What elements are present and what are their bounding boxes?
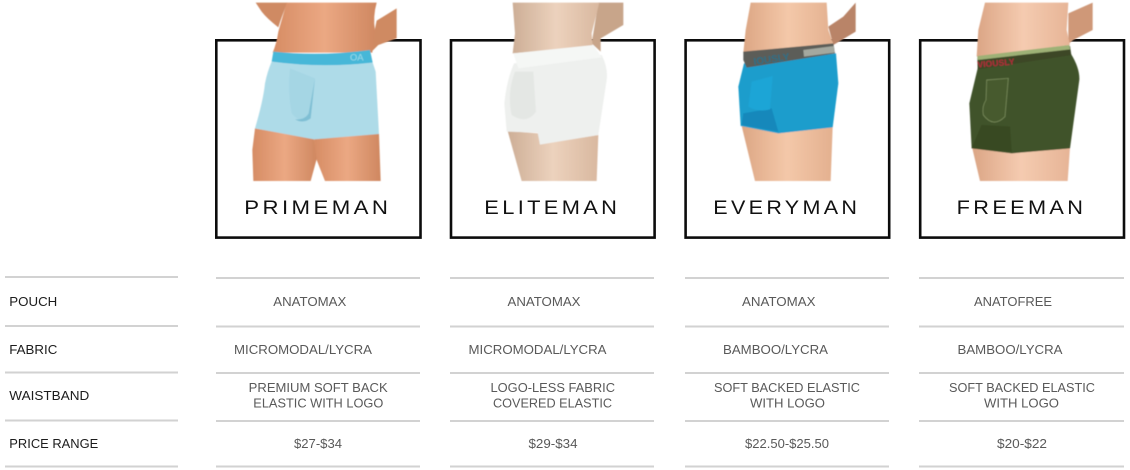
values: Everyman bbox=[714, 295, 860, 451]
frame: Eliteman bbox=[451, 40, 655, 238]
values: Eliteman: MICROMODAL/LYCRA bbox=[468, 343, 607, 357]
row labels: FABRIC bbox=[9, 343, 57, 357]
row dividers bbox=[5, 277, 1124, 466]
heading: Freeman: FREEMAN bbox=[957, 197, 1086, 219]
photo: Everyman blue trunks: IOUSLY bbox=[753, 52, 791, 68]
column: Freeman bbox=[920, 3, 1124, 238]
values: Primeman: ANATOMAX bbox=[273, 295, 347, 309]
values: Everyman: BAMBOO/LYCRA bbox=[723, 343, 829, 357]
photo: Everyman blue trunks bbox=[738, 3, 856, 181]
heading: Everyman: EVERYMAN bbox=[713, 197, 860, 219]
values: Eliteman bbox=[468, 295, 615, 451]
values: Primeman: MICROMODAL/LYCRA bbox=[234, 343, 373, 357]
values: Freeman bbox=[949, 295, 1095, 451]
values: Freeman: $20-$22 bbox=[997, 437, 1047, 451]
row labels: WAISTBAND bbox=[9, 389, 89, 403]
photo: Eliteman white trunks bbox=[504, 3, 623, 181]
values: Eliteman: ANATOMAX bbox=[508, 295, 581, 309]
row labels bbox=[9, 295, 98, 451]
heading: Primeman: PRIMEMAN bbox=[244, 197, 391, 219]
values: Primeman: PREMIUM SOFT BACK bbox=[249, 381, 388, 395]
values: Eliteman: LOGO-LESS FABRIC bbox=[490, 381, 615, 395]
values: Everyman: $22.50-$25.50 bbox=[745, 437, 829, 451]
column: Eliteman bbox=[451, 3, 655, 238]
photo: Primeman light blue trunks: OA bbox=[350, 53, 364, 63]
values: Primeman bbox=[234, 295, 388, 451]
frame: Primeman bbox=[216, 40, 420, 238]
values: Primeman: ELASTIC WITH LOGO bbox=[253, 396, 384, 410]
values: Everyman: WITH LOGO bbox=[750, 396, 825, 410]
values: Eliteman: COVERED ELASTIC bbox=[493, 396, 612, 410]
values: Everyman: SOFT BACKED ELASTIC bbox=[714, 381, 860, 395]
values: Freeman: ANATOFREE bbox=[974, 295, 1052, 309]
heading: Eliteman: ELITEMAN bbox=[484, 197, 620, 219]
photo: Freeman olive trunks bbox=[969, 3, 1093, 181]
frame: Freeman bbox=[920, 40, 1124, 238]
row labels: POUCH bbox=[9, 295, 57, 309]
values: Freeman: BAMBOO/LYCRA bbox=[958, 343, 1063, 357]
photo: Primeman light blue trunks bbox=[252, 3, 397, 181]
row labels: PRICE RANGE bbox=[9, 437, 98, 451]
column: Primeman bbox=[216, 3, 420, 238]
values: Freeman: WITH LOGO bbox=[984, 396, 1059, 410]
frame: Everyman bbox=[686, 40, 889, 238]
values: Freeman: SOFT BACKED ELASTIC bbox=[949, 381, 1095, 395]
column: Everyman bbox=[686, 3, 889, 238]
values: Everyman: ANATOMAX bbox=[742, 295, 816, 309]
values: Eliteman: $29-$34 bbox=[528, 437, 578, 451]
values: Primeman: $27-$34 bbox=[294, 437, 342, 451]
photo: Freeman olive trunks: VIOUSLY bbox=[977, 56, 1015, 70]
